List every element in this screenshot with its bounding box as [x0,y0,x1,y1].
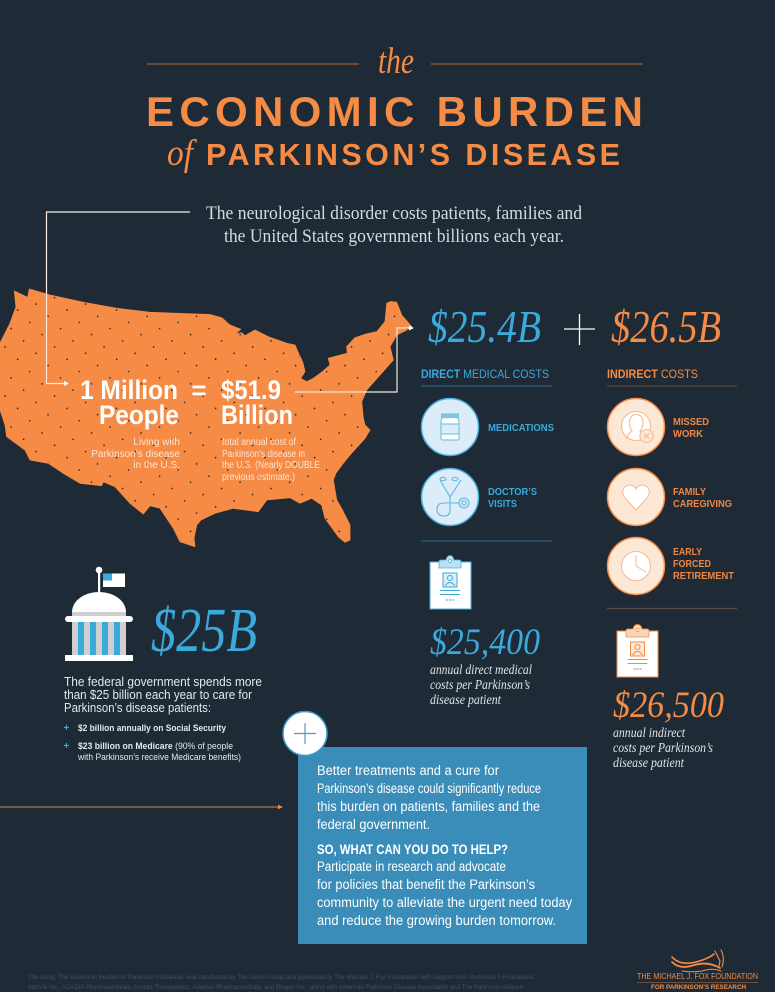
label: family caregiving [673,486,732,510]
federal spending bullets: + [64,741,70,752]
icon: heart [608,468,664,526]
federal spending text: The federal government spends more [64,675,262,689]
label: early forced retirement: EARLY [673,546,702,558]
logo: Michael J. Fox Foundation: FOR PARKINSON’S RESEARCH [651,984,746,991]
icon: plus circle [283,712,327,756]
federal spending bullets: $23 billion on Medicare (90% of people [78,741,233,751]
federal spending text [64,675,262,715]
intro text: The neurological disorder costs patients, families and [206,203,582,224]
footnote: The study, The Economic Burden of Parkinson’s Disease, was conducted by The Lewin Group and published by The Michael J. Fox Foundation with support from Parkinson’s Foundation, [28,974,535,981]
figure: per patient direct: $25,400 [430,622,540,663]
map stat: 1 million people [80,375,180,471]
federal spending text: than $25 billion each year to care for [64,688,252,702]
arrow: to callout [0,805,283,809]
callout panel: Parkinson’s disease could significantly reduce [317,781,541,796]
logo: Michael J. Fox Foundation [637,950,758,991]
map stat: 51.9 billion: total annual cost of [222,437,296,448]
federal spending bullets: with Parkinson’s receive Medicare benefits) [77,752,241,762]
direct cost figure: $25.4B [428,301,541,352]
map stat: 51.9 billion: $51.9 [221,375,281,405]
map: United States [0,289,412,547]
label: missed work [673,416,709,440]
label: doctor's visits [488,486,537,510]
title: the [378,41,414,82]
title: ECONOMIC BURDEN [146,88,643,135]
label: family caregiving: CAREGIVING [673,498,732,510]
caption: per patient indirect [613,725,713,770]
figure: per patient indirect: $26,500 [613,685,724,726]
title: of [167,133,197,174]
callout panel: Participate in research and advocate [317,859,506,874]
indirect cost figure: $26.5B [611,301,721,352]
callout panel: this burden on patients, families and the [317,799,540,814]
title [146,41,643,174]
federal spending bullets [64,723,241,762]
callout panel: Better treatments and a cure for [317,763,499,778]
map stat: 51.9 billion: Parkinson’s disease in [222,449,305,460]
label: doctor's visits: DOCTOR’S [488,486,537,498]
caption: per patient indirect: costs per Parkinson’s [613,740,713,755]
map stat: 1 million people: Living with [133,437,180,448]
label: missed work: WORK [673,428,703,440]
heading: indirect costs: INDIRECT COSTS [607,369,698,381]
icon: capitol building [65,567,133,661]
caption: per patient indirect: disease patient [613,755,685,770]
caption: per patient direct: costs per Parkinson’s [430,677,530,692]
icon: stethoscope [422,468,478,526]
callout panel: SO, WHAT CAN YOU DO TO HELP? [317,842,508,857]
intro text [206,203,582,247]
caption: per patient direct [430,662,532,707]
map stat: 1 million people: Parkinson’s disease [91,449,180,460]
figure: federal spend: $25B [151,597,257,665]
connector arrow: intro to map [46,212,190,386]
footnote: AbbVie Inc., ACADIA Pharmaceuticals, Acorda Therapeutics, Adamas Pharmaceuticals, and Biogen Inc., along with American Parkinson Disease Association and The Parkinson Alliance. [28,984,525,991]
label: early forced retirement [673,546,735,582]
map stat: 1 million people: 1 Million [80,375,178,405]
label: early forced retirement: FORCED [673,558,711,570]
federal spending bullets: $2 billion annually on Social Security [78,723,226,733]
icon: clock [608,538,664,594]
caption: per patient indirect: annual indirect [613,725,686,740]
direct medical costs column [421,369,554,707]
callout panel [298,747,587,944]
icon: missed work [608,398,664,456]
connector arrow: map to costs [295,326,414,392]
heading: direct medical costs: DIRECT MEDICAL COSTS [421,369,549,381]
plus sign [564,314,595,345]
federal spending text: Parkinson’s disease patients: [64,701,211,715]
intro text: the United States government billions each year. [224,226,564,247]
map stat: 51.9 billion: previous estimate.) [222,472,295,483]
caption: per patient direct: annual direct medical [430,662,532,677]
icon: clipboard [430,556,471,609]
footnote [28,974,535,991]
map stat: 51.9 billion [221,375,320,483]
callout panel: community to alleviate the urgent need today [317,895,572,910]
map stat: 1 million people: People [99,400,179,430]
callout panel: for policies that benefit the Parkinson’s [317,877,535,892]
label: doctor's visits: VISITS [488,498,517,510]
caption: per patient direct: disease patient [430,692,502,707]
federal spending bullets: + [64,723,70,734]
map stat: 1 million people: in the U.S. [133,460,180,471]
map stat: 51.9 billion: the U.S. (Nearly DOUBLE [222,460,320,471]
equals sign: = [191,375,207,405]
indirect costs column [607,369,737,770]
label: medications: MEDICATIONS [488,422,554,434]
icon: medications [422,398,478,456]
callout panel: federal government. [317,817,430,832]
icon: clipboard orange [617,624,658,677]
map stat: 51.9 billion: Billion [221,400,293,430]
callout panel: and reduce the growing burden tomorrow. [317,913,556,928]
label: early forced retirement: RETIREMENT [673,570,735,582]
label: missed work: MISSED [673,416,709,428]
label: family caregiving: FAMILY [673,486,706,498]
title: PARKINSON’S DISEASE [206,138,620,172]
